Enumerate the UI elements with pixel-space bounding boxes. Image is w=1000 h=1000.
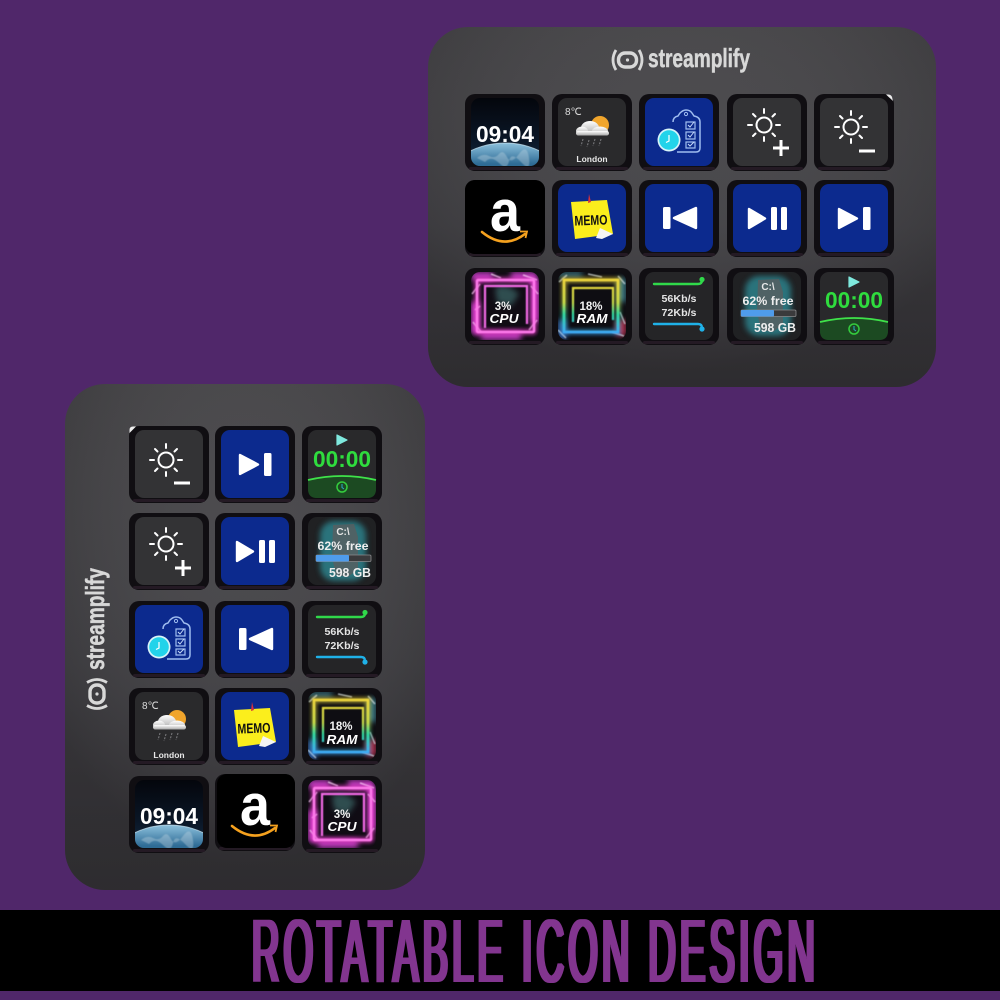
key: network speed	[302, 601, 382, 678]
banner background	[0, 910, 1000, 991]
key: amazon: a	[240, 773, 271, 838]
device: portrait Streamplify deck	[65, 384, 425, 919]
key: CPU meter: CPU	[490, 312, 520, 326]
key: clock: 09:04	[140, 803, 198, 829]
key: brightness down	[814, 94, 894, 171]
key: network speed: 72Kb/s	[324, 640, 360, 652]
key: brightness up	[727, 94, 807, 171]
key: clock: 09:04	[476, 121, 534, 147]
key: RAM meter: 18%	[329, 721, 353, 733]
key: clock	[129, 776, 209, 853]
key: network speed: 72Kb/s	[662, 307, 697, 319]
key: amazon	[465, 179, 545, 257]
key: next track	[215, 426, 295, 503]
key: CPU meter	[465, 268, 545, 345]
key: disk usage: 62% free	[318, 539, 369, 553]
key: weather	[129, 688, 209, 765]
device body	[65, 384, 425, 890]
key: weather: London	[576, 154, 608, 164]
key: timer	[302, 426, 382, 503]
key: RAM meter: 18%	[579, 301, 603, 313]
logo icon	[613, 50, 642, 70]
logo wordmark: streamplify	[80, 568, 110, 670]
key: network speed: 56Kb/s	[662, 293, 697, 305]
key: previous track	[639, 180, 719, 257]
key: task clipboard	[129, 601, 209, 678]
key: play pause	[727, 180, 807, 257]
key: weather: 8℃	[565, 107, 582, 118]
key: memo note: MEMO	[237, 719, 271, 737]
key: weather: 8℃	[142, 701, 159, 712]
key: play pause	[215, 513, 295, 590]
key: next track	[814, 180, 894, 257]
key: timer: 00:00	[313, 446, 371, 472]
key: timer: 00:00	[825, 287, 883, 313]
key: memo note: MEMO	[574, 211, 608, 229]
title banner	[0, 901, 1000, 1000]
key: RAM meter	[302, 688, 382, 765]
key: disk usage: 62% free	[742, 294, 794, 308]
key: weather	[552, 94, 632, 171]
key: memo note	[552, 180, 632, 257]
key: network speed	[639, 268, 719, 345]
key: CPU meter	[302, 776, 382, 853]
key: timer	[814, 268, 894, 345]
key: brightness up	[129, 513, 209, 590]
key: disk usage: 598 GB	[329, 566, 371, 580]
key: amazon: a	[490, 179, 521, 244]
key: CPU meter: CPU	[328, 820, 358, 834]
key: network speed: 56Kb/s	[324, 626, 360, 638]
key: brightness down	[129, 426, 209, 503]
logo wordmark: streamplify	[648, 43, 750, 73]
key: disk usage: C:\	[336, 527, 350, 538]
key: clock	[465, 94, 545, 171]
logo icon	[87, 680, 107, 708]
key: previous track	[215, 601, 295, 678]
device body	[428, 27, 936, 387]
key: CPU meter: 3%	[495, 301, 511, 313]
logo: streamplify rotated	[80, 568, 110, 708]
key: CPU meter: 3%	[334, 809, 350, 821]
key: amazon	[215, 773, 295, 851]
key: weather: London	[153, 750, 185, 760]
key: RAM meter: RAM	[326, 733, 358, 747]
device: landscape Streamplify deck	[428, 27, 936, 387]
title text: ROTATABLE ICON DESIGN	[252, 901, 815, 1000]
key: disk usage	[727, 268, 807, 345]
key: disk usage: C:\	[761, 282, 775, 293]
key: disk usage	[302, 513, 382, 590]
key: task clipboard	[639, 94, 719, 171]
key: memo note	[215, 688, 295, 765]
logo: streamplify	[613, 43, 750, 73]
key: RAM meter: RAM	[576, 312, 608, 326]
key: RAM meter	[552, 268, 632, 345]
key: disk usage: 598 GB	[754, 321, 796, 335]
